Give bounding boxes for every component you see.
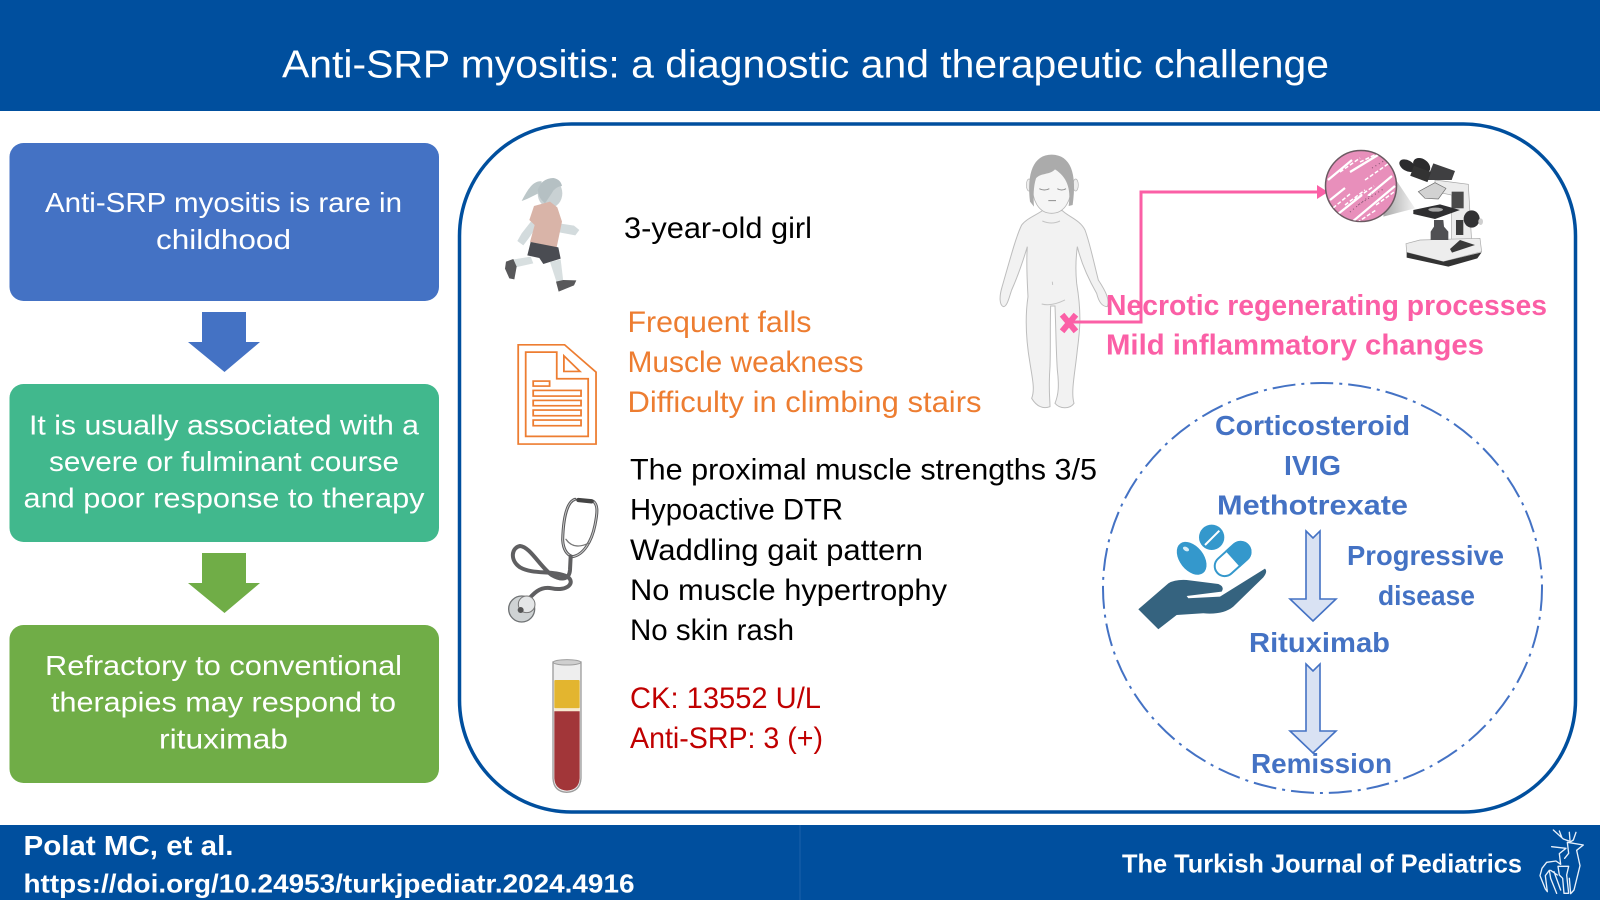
text: citation (24, 830, 634, 898)
panel: rare in childhood: Anti-SRP myositis is rare in (45, 187, 402, 218)
text: progressive disease: Progressive (1347, 540, 1504, 571)
panel: severe course: and poor response to therapy (24, 482, 425, 514)
header band (0, 0, 1600, 111)
text: age: 3-year-old girl (624, 212, 812, 245)
icon: running girl (505, 178, 579, 292)
footer band (0, 825, 1600, 900)
text: rituximab: Rituximab (1249, 627, 1390, 658)
arrow: blue down (188, 312, 260, 372)
text: examination: The proximal muscle strengths 3/5 (630, 454, 1097, 486)
arrow: rituximab to remission (1290, 664, 1336, 753)
panel: severe course (10, 384, 439, 542)
panel: severe course: It is usually associated with a (29, 410, 420, 440)
panel: rare in childhood: childhood (156, 224, 291, 255)
arrow: progression to rituximab (1290, 531, 1336, 621)
panel: rituximab response: therapies may respond to (51, 686, 396, 718)
text: first-line therapies: IVIG (1284, 450, 1341, 481)
text: citation: Polat MC, et al. (24, 830, 234, 861)
arrow: biopsy connector (1072, 185, 1328, 322)
text: symptoms: Difficulty in climbing stairs (628, 386, 982, 419)
treatment circle (1103, 383, 1542, 793)
arrow: green down (188, 553, 260, 613)
text: symptoms: Frequent falls (628, 306, 812, 339)
text: progressive disease (1347, 540, 1504, 611)
panel: rituximab response: rituximab (159, 724, 288, 754)
panel: severe course: severe or fulminant course (49, 446, 399, 477)
icon: child body (1000, 155, 1108, 408)
icon: blood tube (553, 660, 581, 792)
panel: rituximab response (10, 625, 439, 783)
text: symptoms (628, 306, 982, 419)
text: lab results (630, 682, 823, 755)
icon: microscope (1383, 155, 1483, 267)
panel: case outline (460, 124, 1576, 812)
text: biopsy findings: Necrotic regenerating processes (1106, 290, 1547, 322)
text: journal name: The Turkish Journal of Pediatrics (1122, 848, 1522, 878)
icon: histology lens (1326, 150, 1396, 226)
text: citation: https://doi.org/10.24953/turkjpediatr.2024.4916 (24, 868, 634, 898)
title: Anti-SRP myositis: a diagnostic and therapeutic challenge (282, 44, 1329, 86)
text: progressive disease: disease (1378, 580, 1475, 611)
icon: hand with pills (1138, 525, 1266, 629)
text: biopsy findings: Mild inflammatory changes (1106, 330, 1484, 362)
text: first-line therapies: Methotrexate (1217, 490, 1408, 520)
text: lab results: Anti-SRP: 3 (+) (630, 722, 823, 755)
panel: rare in childhood (10, 143, 439, 301)
text: examination: No skin rash (630, 614, 794, 647)
text: examination: Hypoactive DTR (630, 494, 843, 526)
icon: deer logo (1540, 830, 1583, 894)
text: first-line therapies (1215, 410, 1410, 520)
text: examination (630, 454, 1097, 647)
text: remission: Remission (1251, 748, 1392, 779)
text: first-line therapies: Corticosteroid (1215, 410, 1410, 441)
icon: stethoscope (509, 499, 597, 622)
text: examination: No muscle hypertrophy (630, 574, 947, 607)
text: symptoms: Muscle weakness (628, 346, 864, 379)
text: lab results: CK: 13552 U/L (630, 682, 821, 715)
text: examination: Waddling gait pattern (630, 534, 923, 567)
icon: biopsy mark (1064, 317, 1074, 329)
panel: rituximab response: Refractory to conventional (45, 650, 402, 681)
icon: document (518, 345, 596, 444)
text: biopsy findings (1106, 290, 1547, 362)
